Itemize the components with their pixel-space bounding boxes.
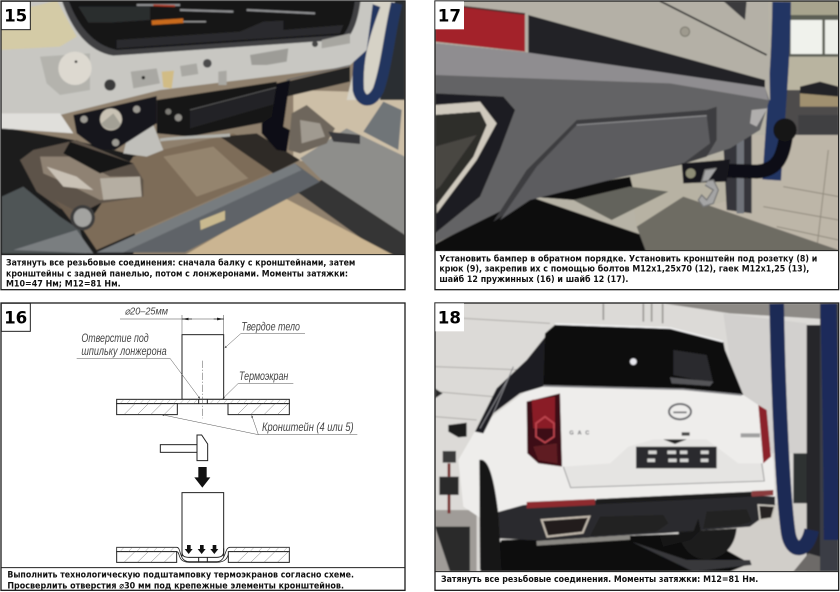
- caption: step 17: шайб 12 пружинных (16) и шайб 12 (17).: [439, 274, 628, 285]
- photo: towbar beam under the car: [0, 0, 407, 257]
- caption: step 16: Выполнить технологическую подштамповку термоэкранов согласно схеме.: [7, 570, 354, 580]
- photo: finished car with towbar: GAC: [569, 430, 589, 436]
- caption: step 15: [1, 255, 405, 290]
- caption: step 15: М10=47 Нм; М12=81 Нм.: [6, 280, 121, 290]
- photo: bumper with towbar: [430, 0, 840, 253]
- step number 16: [1, 303, 30, 331]
- label: hole for spar stud: шпильку лонжерона: [81, 345, 167, 358]
- diagram: stamped result: [117, 493, 289, 562]
- panel: step 17: [430, 0, 840, 290]
- dimension: diameter 20-25 mm: ⌀20–25мм: [125, 307, 168, 318]
- caption: step 15: кронштейны с задней панелью, потом с лонжеронами. Моменты затяжки:: [6, 269, 348, 279]
- panel: step 15: [0, 0, 407, 290]
- caption: step 15: Затянуть все резьбовые соединения: сначала балку с кронштейнами, затем: [6, 258, 355, 269]
- label: hole for spar stud: Отверстие под: [81, 332, 149, 345]
- step number 15: 15: [4, 6, 27, 25]
- arrow: down: [194, 467, 210, 488]
- label: solid body: Твердое тело: [241, 321, 300, 334]
- step number 15: [1, 1, 30, 30]
- label: bracket: [162, 415, 357, 435]
- step number 18: [435, 303, 464, 331]
- photo: finished car with towbar: [430, 300, 840, 577]
- label: bracket: Кронштейн (4 или 5): [262, 421, 354, 434]
- dimension: diameter 20-25 mm: [120, 307, 224, 335]
- panel: step 16: [1, 303, 405, 591]
- label: heat shield: Термоэкран: [239, 370, 289, 383]
- caption: step 16: Просверлить отверстия ⌀30 мм под крепежные элементы кронштейнов.: [7, 581, 344, 591]
- step number 16: 16: [4, 309, 27, 328]
- caption: step 16: [1, 568, 405, 591]
- panel: step 18: [430, 300, 840, 590]
- diagram: upper assembly: [117, 335, 289, 418]
- label: solid body: [225, 321, 305, 348]
- step number 18: 18: [438, 309, 461, 328]
- step number 17: [435, 1, 464, 29]
- label: hole for spar stud: [77, 332, 200, 399]
- label: heat shield: [223, 370, 293, 399]
- step number 17: 17: [438, 6, 461, 25]
- technical diagram: heat shield stamping: [77, 307, 357, 562]
- caption: step 18: [435, 572, 839, 590]
- caption: step 17: [435, 251, 839, 290]
- icon: hammer: [160, 435, 208, 461]
- caption: step 18: Затянуть все резьбовые соединения. Моменты затяжки: М12=81 Нм.: [441, 574, 758, 585]
- arrows: pressing force: [185, 545, 218, 554]
